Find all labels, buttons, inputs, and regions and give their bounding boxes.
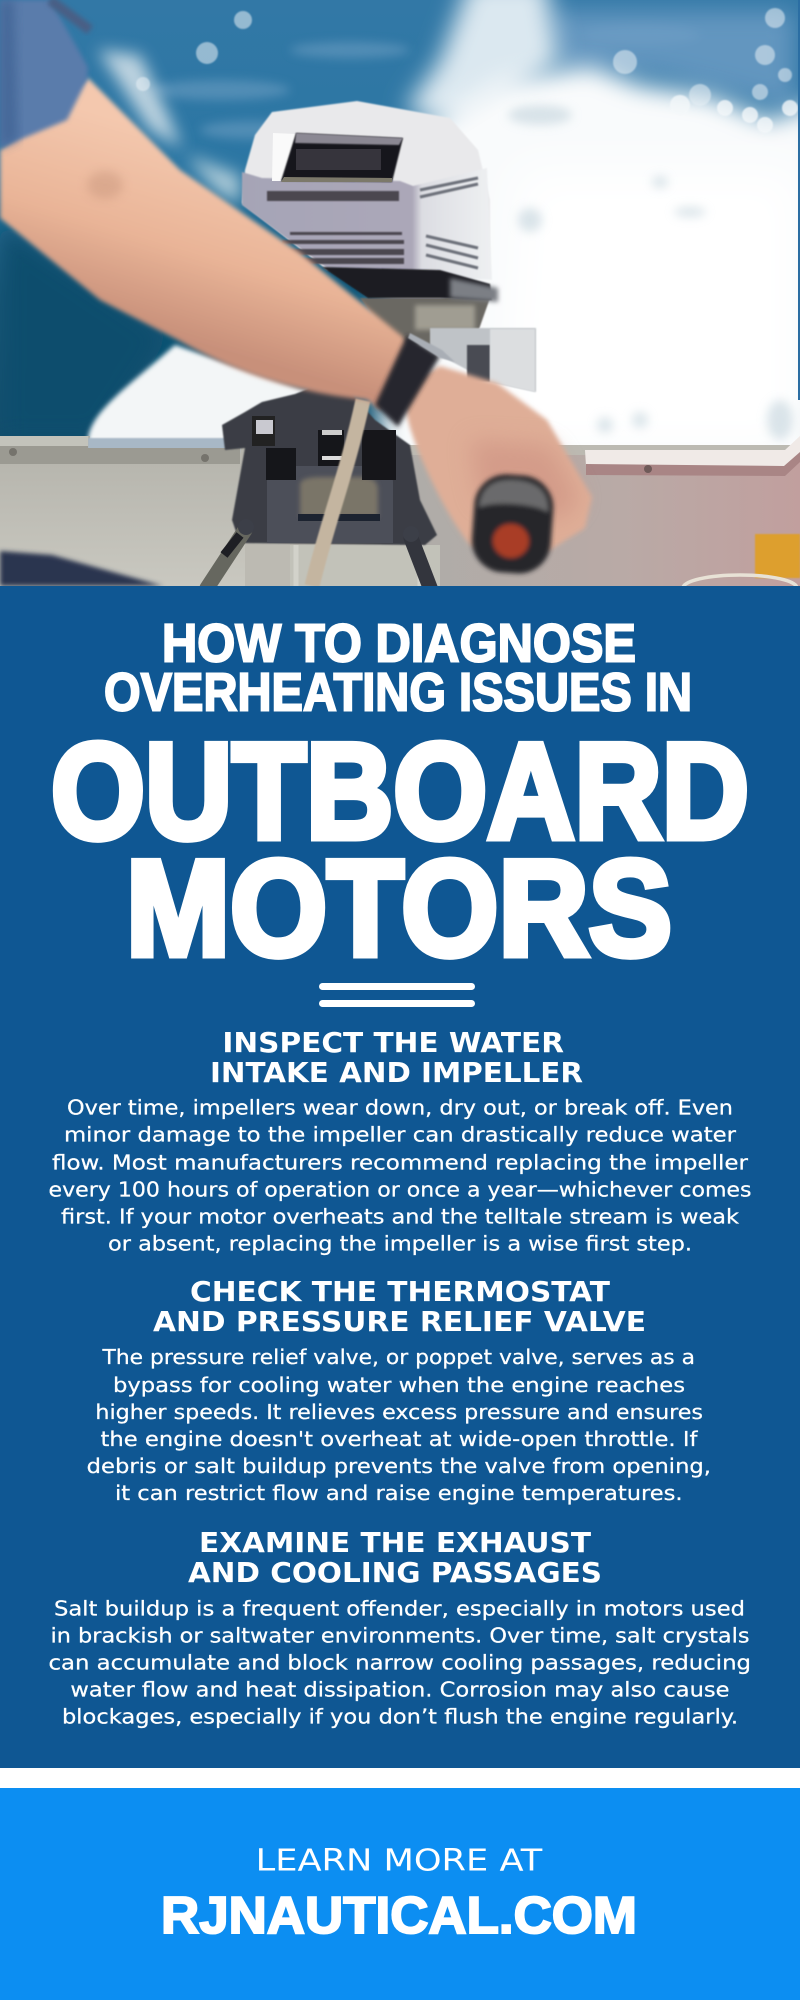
section 3: exhaust and cooling passages [48,1526,751,1728]
section 2 body text [87,1345,711,1505]
section 2 body text: The pressure relief valve, or poppet valve, serves as a [101,1345,695,1369]
water: dark teal left [0,223,147,349]
section 2 body text: it can restrict flow and raise engine temperatures. [115,1481,683,1505]
section 3 heading: EXAMINE THE EXHAUST [199,1526,591,1559]
hand [405,366,592,556]
section 2 body text: higher speeds. It relieves excess pressure and ensures [95,1400,703,1424]
foam: central wake [380,65,800,470]
warning sticker [755,534,800,578]
foam: top streak [405,0,560,130]
title [51,614,749,984]
hull: right side [400,455,800,586]
section 1 heading [210,1026,583,1089]
section 3 body text: can accumulate and block narrow cooling passages, reducing [48,1650,751,1674]
section 2 body text: the engine doesn't overheat at wide-open throttle. If [100,1427,698,1451]
section 3 body text: in brackish or saltwater environments. Over time, salt crystals [50,1623,750,1647]
website address: RJNAUTICAL.COM [161,1887,637,1945]
shirt sleeve [0,0,88,148]
panel: main article [0,586,800,1768]
section 2 body text: bypass for cooling water when the engine reaches [113,1373,685,1397]
section 2 heading: CHECK THE THERMOSTAT [190,1275,610,1308]
clamp: arch plate [267,466,393,543]
foam: left spray [98,50,182,148]
section 1 body text: or absent, replacing the impeller is a wise first step. [108,1232,692,1256]
clamp legs [207,530,245,588]
section 2 heading: AND PRESSURE RELIEF VALVE [153,1305,646,1338]
motor: label stripes [267,191,404,264]
title: HOW TO DIAGNOSE [162,614,636,674]
foam: shaded patches [508,105,793,440]
rope ring [682,573,798,586]
title: MOTORS [126,832,672,984]
section 3 heading: AND COOLING PASSAGES [188,1556,602,1589]
foam: lower left wash [88,345,320,445]
foam bokeh speckles [136,8,792,106]
section 3 heading [188,1526,602,1589]
section 3 body text: Salt buildup is a frequent offender, especially in motors used [54,1596,745,1620]
motor: dark intake window [272,133,296,181]
watch [375,335,440,427]
divider double rule [319,983,475,1007]
section 3 body text: water flow and heat dissipation. Corrosion may also cause [70,1677,730,1701]
title: OVERHEATING ISSUES IN [104,663,692,723]
photo: hand steering an outboard motor on a boat [0,0,800,601]
section 1 body text: minor damage to the impeller can drastically reduce water [64,1123,737,1147]
section 1 heading: INSPECT THE WATER [222,1026,564,1059]
water: lighter horizontal ripples [154,39,408,142]
rope [312,400,363,586]
section 1 body text: flow. Most manufacturers recommend replacing the impeller [52,1150,749,1174]
section 1 body text: Over time, impellers wear down, dry out, or break off. Even [67,1095,733,1119]
clamp bracket [222,388,437,545]
motor: black band [322,267,492,300]
section 2: thermostat and pressure relief valve [87,1275,711,1505]
hull: under-clamp panel [245,445,790,586]
section 3 body text [48,1596,751,1728]
throttle grip [470,472,555,576]
section 1 body text: every 100 hours of operation or once a year—whichever comes [48,1178,752,1202]
arm [0,78,420,410]
section 1 body text: first. If your motor overheats and the telltale stream is weak [61,1204,739,1228]
hull: left side [0,436,245,586]
water: pale blue top right [540,10,795,110]
motor: lower bracket [360,298,490,345]
section 2 body text: debris or salt buildup prevents the valve from opening, [87,1454,711,1478]
section 2 heading [153,1275,646,1338]
section 1: water intake and impeller [48,1026,752,1256]
motor: cowl [242,101,490,275]
section 3 body text: blockages, especially if you don’t flush the engine regularly. [62,1704,738,1728]
footer call to action [0,1788,800,2000]
section 1 body text [48,1095,752,1256]
dark knee in foreground [0,551,163,586]
section 1 heading: INTAKE AND IMPELLER [210,1056,583,1089]
arm shading near elbow [87,171,123,199]
learn more label: LEARN MORE AT [256,1844,543,1879]
